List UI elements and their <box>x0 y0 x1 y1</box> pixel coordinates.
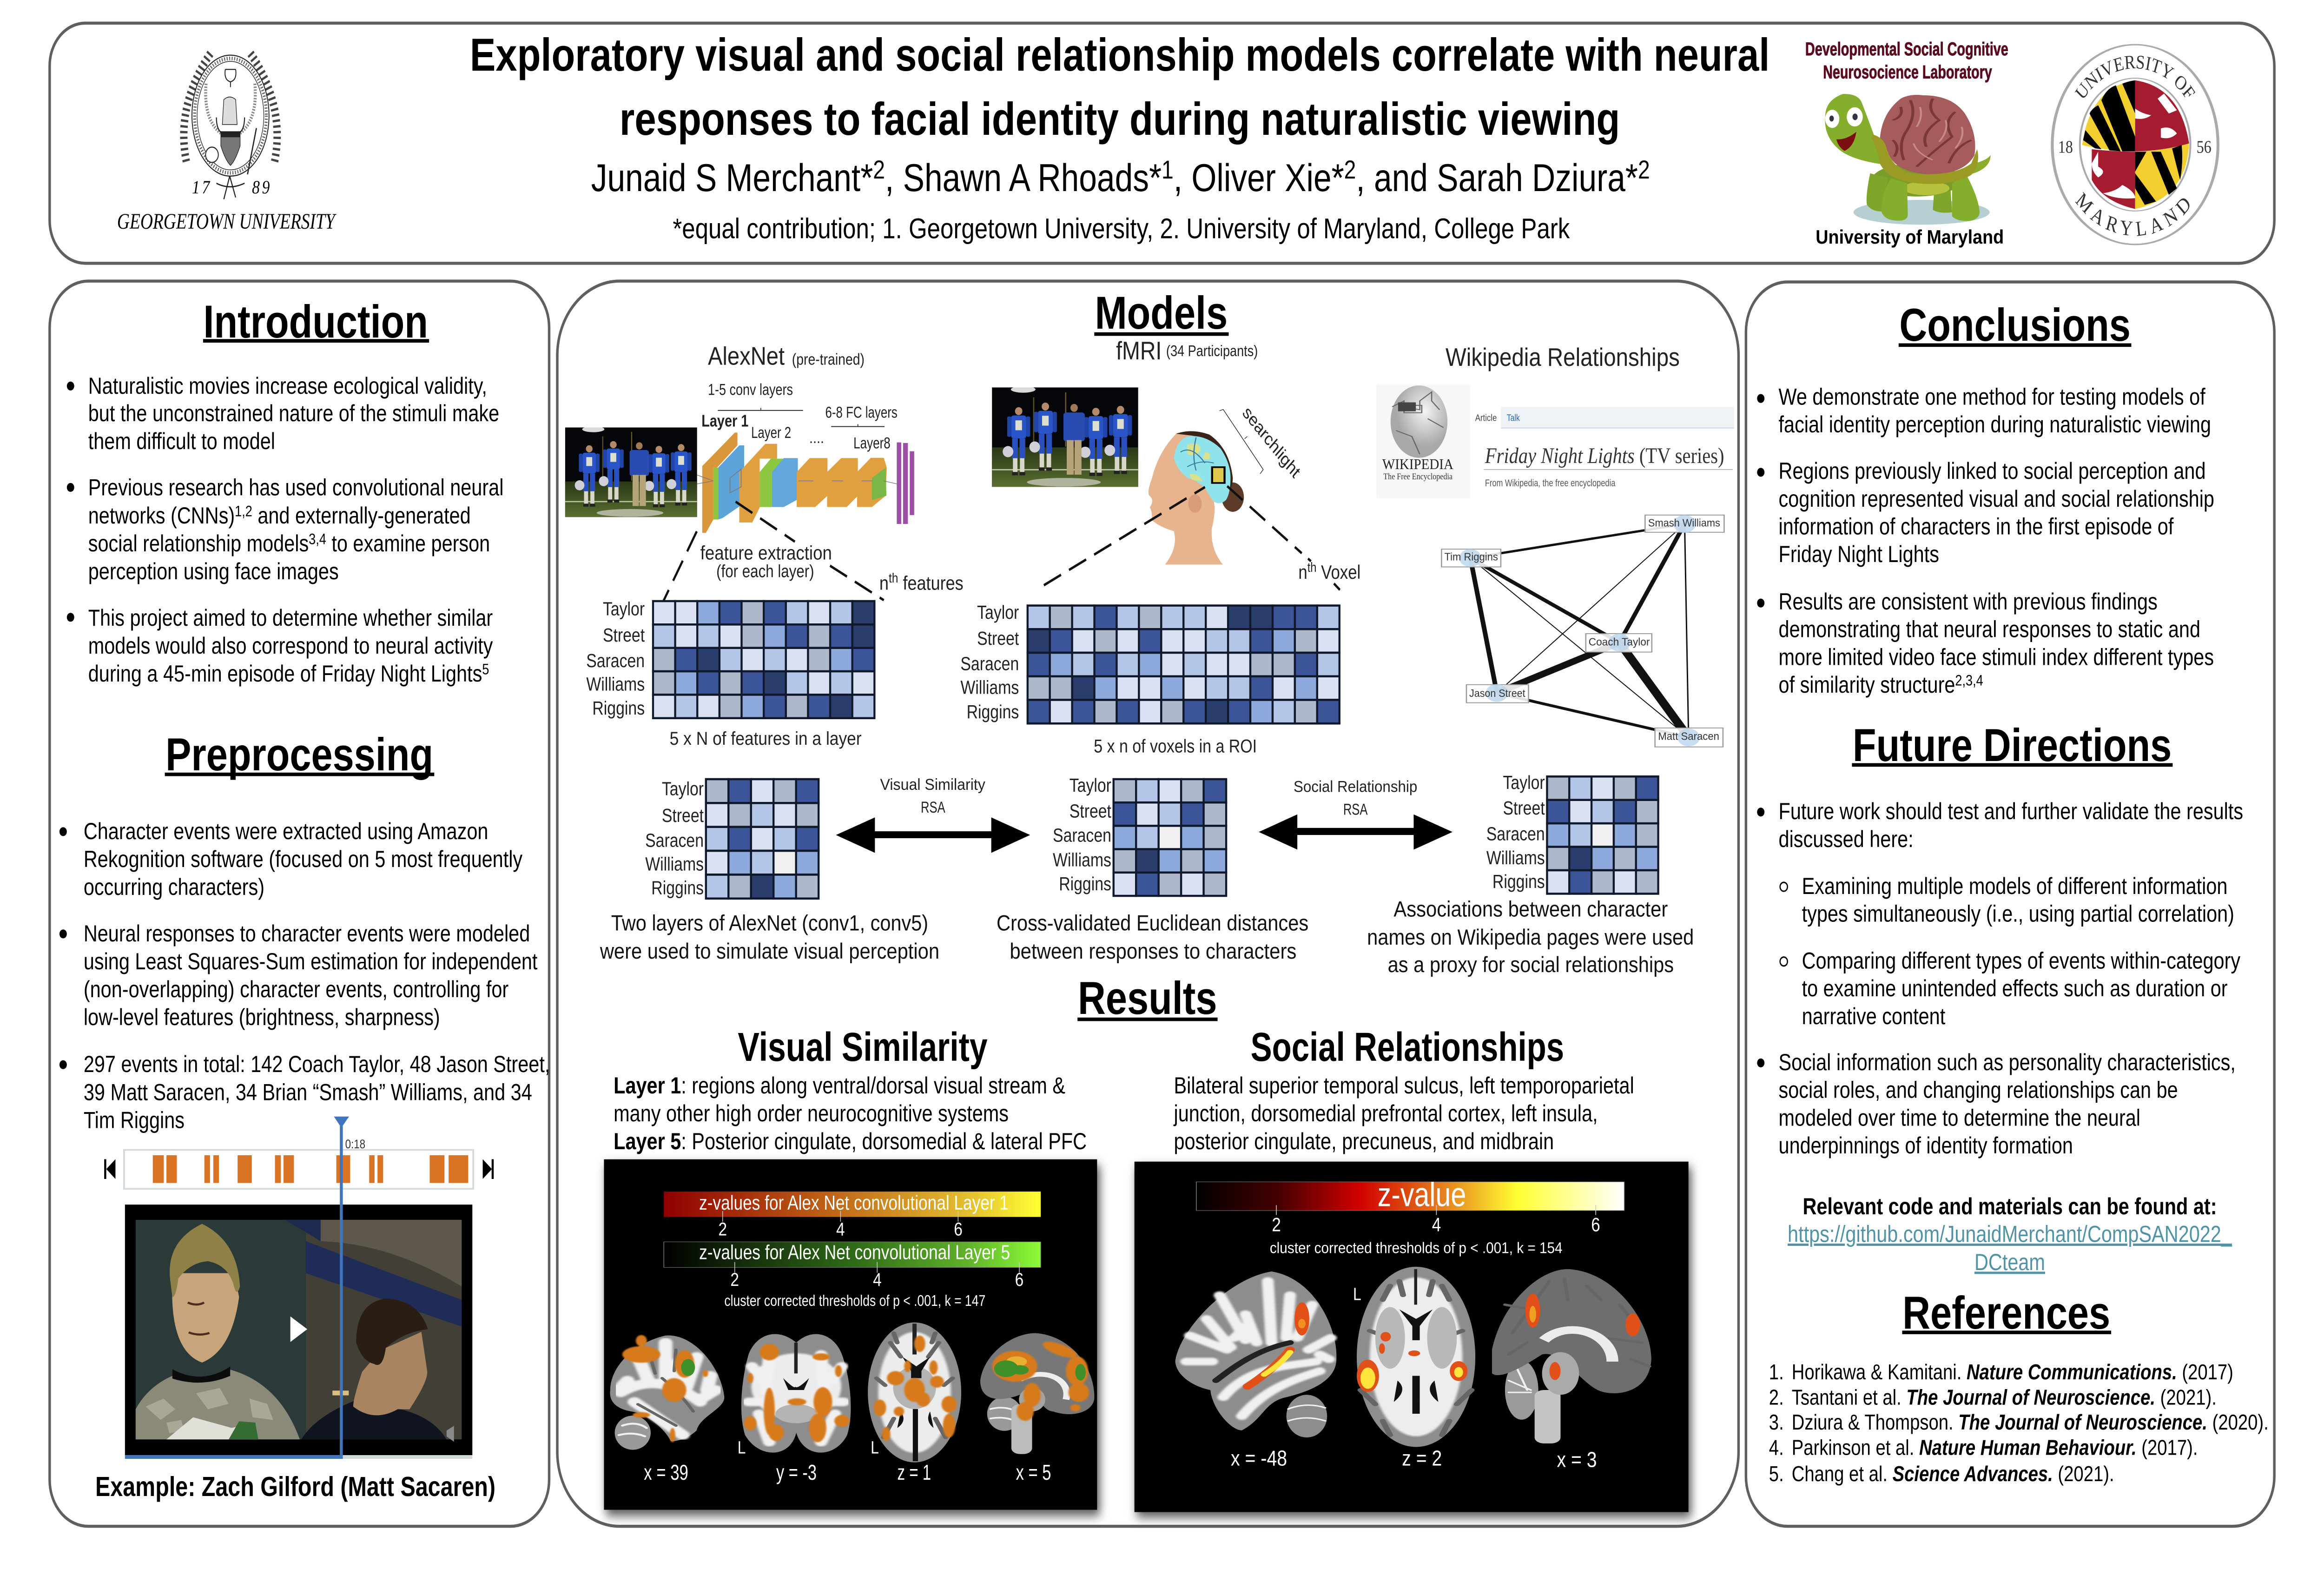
row labels: fMRI RDM: Riggins <box>1059 873 1111 894</box>
heading: References: References <box>1902 1287 2110 1339</box>
colorbar label: 4 <box>1432 1214 1441 1236</box>
slice labels: x = -48 <box>1231 1446 1287 1470</box>
row labels: fMRI RDM: Williams <box>1053 849 1111 870</box>
text block: introduction bullets: models would also correspond to neural activity <box>88 633 493 659</box>
authors: , Oliver Xie* <box>1174 156 1344 199</box>
arrow: social relationship RSA <box>1259 814 1452 850</box>
row labels: voxel matrix: Taylor <box>977 602 1019 623</box>
code and materials note: DCteam <box>1974 1250 2045 1275</box>
brain slice: z = 1 <box>868 1323 961 1463</box>
feature extraction label: feature extraction <box>700 543 832 564</box>
authors: 2 <box>1344 155 1356 184</box>
text block: introduction bullets: 5 <box>482 661 489 678</box>
colorbar: z-value <box>1196 1182 1624 1215</box>
row labels: voxel matrix: Williams <box>960 676 1019 698</box>
row labels: fMRI RDM: Saracen <box>1053 825 1111 846</box>
code and materials note <box>1788 1193 2232 1275</box>
colorbar labels: z-values for Alex Net convolutional Layer 1 <box>699 1191 1009 1214</box>
colorbar labels <box>699 1191 1023 1310</box>
row labels: Wikipedia RDM: Saracen <box>1486 823 1545 844</box>
text block: future directions bullets: to examine unintended effects such as duration or <box>1802 976 2228 1001</box>
text block: introduction bullets: perception using face images <box>88 558 339 584</box>
slice labels <box>644 1438 1051 1484</box>
colorbar label <box>1270 1176 1600 1257</box>
caption: Wikipedia RDM: Associations between character <box>1393 897 1668 921</box>
brain map panel: social relationships <box>1135 1162 1691 1517</box>
text block: preprocessing bullets: low-level features (brightness, sharpness) <box>84 1005 440 1030</box>
colorbar label: 2 <box>1272 1214 1281 1236</box>
text block: visual similarity results: Layer 1: regions along ventral/dorsal visual stream & <box>614 1072 1065 1099</box>
row labels: fMRI RDM <box>1053 775 1112 894</box>
photo: cast frame for fMRI <box>992 386 1138 487</box>
text block: visual similarity results: Layer 5: Posterior cingulate, dorsomedial & lateral PFC <box>614 1128 1087 1154</box>
label: social relationship RSA: RSA <box>1343 800 1368 818</box>
network graph: Coach Taylor <box>1589 636 1650 648</box>
text block: future directions bullets: Examining multiple models of different information <box>1802 873 2227 899</box>
lab name <box>1805 39 2008 82</box>
panel: Conclusions, Future Directions, References <box>1746 282 2274 1526</box>
text block: future directions bullets: Social information such as personality characteristics, <box>1779 1049 2236 1075</box>
label: visual similarity RSA: RSA <box>921 798 945 816</box>
matrix: Wikipedia RDM <box>1547 776 1658 894</box>
network graph: Tim Riggins <box>1444 551 1498 563</box>
slice labels: y = -3 <box>776 1461 817 1484</box>
row labels: feature matrix <box>586 598 645 719</box>
heading: Preprocessing: Preprocessing <box>165 729 433 781</box>
text block: introduction bullets: and externally-generated <box>252 503 471 529</box>
network graph: Matt Saracen <box>1658 731 1719 742</box>
text block: preprocessing bullets: Neural responses to character events were modeled <box>84 920 530 947</box>
colorbar label: 6 <box>1591 1214 1600 1236</box>
network graph: Jason Street <box>1469 688 1525 699</box>
title <box>470 29 1769 145</box>
text block: conclusions bullets: cognition represented visual and social relationship <box>1779 486 2214 512</box>
subheading: Social Relationships: Social Relationships <box>1251 1025 1564 1070</box>
row labels: fMRI RDM: Taylor <box>1070 775 1111 795</box>
panel: Models and Results <box>557 281 1738 1526</box>
text block: conclusions bullets <box>1757 384 2214 698</box>
convolutional network layers <box>697 433 914 533</box>
brain slice: x = 39 <box>610 1335 724 1450</box>
AlexNet label: AlexNet <box>708 341 785 370</box>
text block: social relationship results: junction, dorsomedial prefrontal cortex, left insula, <box>1173 1100 1598 1126</box>
slice labels: x = 5 <box>1016 1461 1051 1484</box>
searchlight label: searchlight <box>1239 403 1304 482</box>
text block: preprocessing bullets: using Least Squares-Sum estimation for independent <box>84 949 538 974</box>
Wikipedia relationships diagram <box>1376 343 1734 747</box>
heading: Conclusions: Conclusions <box>1899 299 2131 351</box>
text block: introduction bullets: them difficult to model <box>88 428 275 454</box>
subheading: Visual Similarity: Visual Similarity <box>738 1025 988 1070</box>
text block: future directions bullets: narrative content <box>1802 1003 1945 1029</box>
row labels: Wikipedia RDM: Taylor <box>1503 772 1545 793</box>
caption: fMRI RDM <box>997 911 1308 964</box>
row labels: AlexNet RDM: Riggins <box>651 877 704 898</box>
text block: preprocessing bullets: 297 events in total: 142 Coach Taylor, 48 Jason Street, <box>84 1052 550 1077</box>
text block: future directions bullets: Comparing different types of events within-category <box>1802 948 2240 973</box>
row labels: voxel matrix: Riggins <box>967 701 1019 722</box>
caption: AlexNet RDM: were used to simulate visual perception <box>600 939 939 964</box>
colorbar: layer 1 <box>664 1192 1041 1222</box>
caption: AlexNet RDM: Two layers of AlexNet (conv1, conv5) <box>611 911 928 936</box>
icon: turtle with brain shell <box>1825 94 1991 225</box>
row labels: feature matrix: Taylor <box>603 598 645 619</box>
text block: preprocessing bullets: (non-overlapping) character events, controlling for <box>84 977 508 1002</box>
brain slice: z = 2 <box>1357 1267 1475 1447</box>
Wikipedia page screenshot: Article <box>1475 412 1497 423</box>
text block: preprocessing bullets <box>59 818 550 1133</box>
text block: conclusions bullets: facial identity perception during naturalistic viewing <box>1779 412 2211 437</box>
slice labels: x = 3 <box>1557 1448 1597 1472</box>
nth voxel label: n <box>1298 562 1307 583</box>
text block: conclusions bullets: Results are consistent with previous findings <box>1779 589 2158 615</box>
feature extraction label: features <box>898 573 964 594</box>
icon: University of Maryland seal <box>2052 45 2218 245</box>
text block: introduction bullets: Naturalistic movies increase ecological validity, <box>88 373 487 399</box>
text block: introduction bullets: This project aimed to determine whether similar <box>88 605 493 631</box>
slice labels: L <box>738 1438 746 1457</box>
icon: head with brain map <box>1149 410 1263 564</box>
icon: University of Maryland seal: 18 <box>2058 137 2073 157</box>
participants label: (34 Participants) <box>1166 342 1258 360</box>
text block: conclusions bullets: information of characters in the first episode of <box>1779 514 2174 539</box>
text block: future directions bullets: Future work should test and further validate the results <box>1779 799 2243 824</box>
lab name: Neurosocience Laboratory <box>1823 62 1992 82</box>
text block: future directions bullets: modeled over time to determine the neural <box>1779 1105 2140 1131</box>
text block: preprocessing bullets: Rekognition software (focused on 5 most frequently <box>84 847 522 872</box>
row labels: fMRI RDM: Street <box>1070 800 1112 821</box>
network graph <box>1441 515 1724 747</box>
text block: introduction bullets: social relationship models <box>88 530 309 556</box>
authors: 2 <box>873 155 885 184</box>
brain slice: x = 3 <box>1492 1269 1651 1443</box>
progress bar <box>125 1455 472 1459</box>
heading: Future Directions: Future Directions <box>1853 720 2172 771</box>
label: visual similarity RSA: Visual Similarity <box>880 775 985 794</box>
reference list <box>1769 1360 2269 1486</box>
brain map panel: visual similarity <box>604 1159 1100 1516</box>
row labels: voxel matrix: Saracen <box>960 653 1019 674</box>
row labels: voxel matrix: Street <box>977 628 1019 649</box>
AlexNet label: Layer 2 <box>751 424 791 442</box>
colorbar: layer 5 <box>664 1242 1041 1273</box>
Wikipedia page screenshot: WIKIPEDIA <box>1382 457 1453 473</box>
authors: 2 <box>1638 155 1650 184</box>
AlexNet label: .... <box>809 428 824 446</box>
fMRI label: fMRI <box>1116 336 1162 365</box>
title: Exploratory visual and social relationship models correlate with neural <box>470 29 1769 81</box>
reference list: 4. Parkinson et al. Nature Human Behaviour. (2017). <box>1769 1436 2198 1459</box>
reference list: 5. Chang et al. Science Advances. (2021). <box>1769 1462 2114 1486</box>
authors: 1 <box>1162 155 1174 184</box>
authors: , and Sarah Dziura* <box>1356 156 1638 199</box>
heading: Results: Results <box>1078 973 1217 1024</box>
video frame <box>125 1205 472 1455</box>
row labels: Wikipedia RDM: Street <box>1503 797 1545 818</box>
text block: preprocessing bullets: Tim Riggins <box>84 1107 185 1133</box>
text block: introduction bullets: networks (CNNs) <box>88 503 235 529</box>
authors: Junaid S Merchant* <box>591 156 873 199</box>
colorbar labels: cluster corrected thresholds of p < .001, k = 147 <box>724 1293 985 1310</box>
text block: conclusions bullets: 2,3,4 <box>1955 672 1983 689</box>
code and materials note: Relevant code and materials can be found at: <box>1802 1193 2217 1219</box>
matrix: AlexNet RDM <box>706 779 819 899</box>
Wikipedia heading: Wikipedia Relationships <box>1446 343 1680 371</box>
matrix: fMRI RDM <box>1114 779 1226 896</box>
row labels: feature matrix: Street <box>603 624 645 646</box>
slice labels: z = 2 <box>1402 1446 1442 1470</box>
fMRI model diagram <box>960 336 1360 756</box>
caption: example: Example: Zach Gilford (Matt Sacaren) <box>95 1471 495 1502</box>
colorbar label: z-value <box>1378 1176 1466 1214</box>
text block: future directions bullets: social roles, and changing relationships can be <box>1779 1077 2178 1103</box>
text block: future directions bullets <box>1757 799 2243 1159</box>
row labels: AlexNet RDM: Saracen <box>645 829 704 851</box>
icon: Georgetown seal <box>184 53 277 199</box>
row labels: Wikipedia RDM: Riggins <box>1492 871 1545 892</box>
brain slice: x = 5 <box>980 1333 1094 1454</box>
colorbar labels: 6 <box>1015 1269 1023 1290</box>
panel: header <box>50 23 2274 263</box>
row labels: AlexNet RDM: Street <box>662 805 704 826</box>
colorbar labels: 2 <box>730 1269 739 1290</box>
matrix: 5 x N features <box>653 601 874 718</box>
row labels: AlexNet RDM: Williams <box>645 853 704 874</box>
feature extraction label: n <box>879 573 888 594</box>
row labels: AlexNet RDM: Taylor <box>662 778 704 799</box>
slice labels: z = 1 <box>897 1461 931 1484</box>
AlexNet label: Layer 1 <box>701 412 748 430</box>
text block: visual similarity results <box>614 1072 1087 1154</box>
icon: University of Maryland seal: 56 <box>2197 137 2212 157</box>
AlexNet label: 1-5 conv layers <box>708 380 793 398</box>
affiliations: *equal contribution; 1. Georgetown University, 2. University of Maryland, College Park <box>673 212 1570 245</box>
text block: social relationship results: posterior cingulate, precuneus, and midbrain <box>1174 1128 1554 1154</box>
nth voxel label: th <box>1307 560 1317 575</box>
row labels: voxel matrix <box>960 602 1019 722</box>
code and materials note: https://github.com/JunaidMerchant/CompSAN2022_ <box>1788 1221 2232 1247</box>
Wikipedia page screenshot: From Wikipedia, the free encyclopedia <box>1485 478 1616 489</box>
caption: AlexNet RDM <box>600 911 939 964</box>
timeline bar <box>104 1150 494 1189</box>
text block: introduction bullets: during a 45-min episode of Friday Night Lights <box>88 661 482 687</box>
network graph: Smash Williams <box>1648 517 1720 529</box>
text block: conclusions bullets: Friday Night Lights <box>1779 542 1939 567</box>
AlexNet label: Layer8 <box>853 434 891 452</box>
reference list: 3. Dziura & Thompson. The Journal of Neuroscience. (2020). <box>1769 1410 2269 1434</box>
dashed projection lines <box>1044 486 1340 590</box>
heading: Models: Models <box>1095 287 1228 339</box>
text block: conclusions bullets: more limited video face stimuli index different types <box>1779 644 2214 670</box>
feature extraction label: th <box>889 570 898 586</box>
lab affiliation text: University of Maryland <box>1816 226 2004 248</box>
arrow: visual similarity RSA <box>836 817 1030 853</box>
text block: introduction bullets: to examine person <box>326 530 490 556</box>
text block: preprocessing bullets: 39 Matt Saracen, 34 Brian “Smash” Williams, and 34 <box>84 1079 532 1105</box>
colorbar labels: 2 <box>719 1219 727 1239</box>
colorbar labels: 6 <box>954 1219 963 1239</box>
Wikipedia page screenshot: Talk <box>1507 412 1520 423</box>
caption: voxel matrix: 5 x n of voxels in a ROI <box>1094 736 1257 756</box>
brain slice: x = -48 <box>1175 1271 1336 1437</box>
slice labels: L <box>871 1438 879 1457</box>
row labels: AlexNet RDM <box>645 778 704 898</box>
caption: fMRI RDM: Cross-validated Euclidean distances <box>997 911 1308 936</box>
photo: cast frame for AlexNet <box>565 426 697 517</box>
title: responses to facial identity during naturalistic viewing <box>620 93 1620 145</box>
icon: University of Maryland seal: MARYLAND <box>2072 188 2198 241</box>
colorbar labels: 4 <box>836 1219 845 1239</box>
dashed projection lines <box>663 502 884 601</box>
caption: Wikipedia RDM: names on Wikipedia pages were used <box>1367 925 1694 950</box>
authors: , Shawn A Rhoads* <box>885 156 1162 199</box>
Wikipedia page screenshot <box>1376 384 1734 498</box>
caption: Wikipedia RDM: as a proxy for social relationships <box>1388 953 1674 977</box>
text block: conclusions bullets: of similarity structure <box>1779 672 1955 698</box>
text block: social relationship results <box>1173 1072 1634 1154</box>
caption: feature matrix: 5 x N of features in a layer <box>670 728 862 749</box>
feature extraction label: (for each layer) <box>716 562 814 581</box>
colorbar labels: z-values for Alex Net convolutional Layer 5 <box>699 1240 1010 1264</box>
feature extraction label <box>700 543 964 594</box>
text block: conclusions bullets: Regions previously linked to social perception and <box>1779 458 2206 484</box>
row labels: feature matrix: Saracen <box>586 650 645 671</box>
reference list: 2. Tsantani et al. The Journal of Neuroscience. (2021). <box>1769 1385 2217 1409</box>
text block: visual similarity results: many other high order neurocognitive systems <box>614 1100 1009 1126</box>
text block: future directions bullets: types simultaneously (i.e., using partial correlation) <box>1802 901 2234 927</box>
brain slice: y = -3 <box>741 1334 851 1453</box>
colorbar label: cluster corrected thresholds of p < .001, k = 154 <box>1270 1240 1563 1257</box>
Wikipedia page screenshot: Friday Night Lights (TV series) <box>1485 444 1724 468</box>
colorbar labels: 4 <box>873 1269 882 1290</box>
caption: Wikipedia RDM <box>1367 897 1694 977</box>
AlexNet label: 6-8 FC layers <box>825 403 898 421</box>
text block: introduction bullets: 1,2 <box>235 503 252 520</box>
RSA comparison row <box>600 772 1694 977</box>
label: visual similarity RSA <box>880 775 985 816</box>
timestamp: 0:18 <box>345 1138 365 1152</box>
text block: introduction bullets: but the unconstrained nature of the stimuli make <box>88 401 499 426</box>
seal year left: 17 <box>192 177 212 198</box>
AlexNet label <box>701 341 898 452</box>
AlexNet label: (pre-trained) <box>792 350 865 368</box>
text block: future directions bullets: underpinnings of identity formation <box>1779 1133 2073 1159</box>
slice labels: x = 39 <box>644 1461 688 1484</box>
text block: introduction bullets: 3,4 <box>309 531 326 548</box>
text block: preprocessing bullets: occurring characters) <box>84 874 264 900</box>
playhead <box>334 1117 349 1459</box>
AlexNet model diagram <box>565 341 964 749</box>
panel: Introduction and Preprocessing <box>50 281 550 1526</box>
label: social relationship RSA: Social Relationship <box>1294 777 1417 795</box>
caption: fMRI RDM: between responses to characters <box>1010 939 1296 964</box>
video timeline and frame <box>104 1117 494 1459</box>
text block: introduction bullets: Previous research has used convolutional neural <box>88 475 503 501</box>
heading: Introduction: Introduction <box>203 296 428 348</box>
slice labels <box>1231 1284 1597 1472</box>
seal year right: 89 <box>252 177 272 198</box>
row labels: feature matrix: Williams <box>586 674 645 695</box>
reference list: 1. Horikawa & Kamitani. Nature Communications. (2017) <box>1769 1360 2233 1384</box>
slice labels: L <box>1353 1284 1361 1304</box>
row labels: Wikipedia RDM <box>1486 772 1545 892</box>
text block: future directions bullets: discussed here: <box>1779 826 1914 852</box>
icon: University of Maryland seal: UNIVERSITY OF <box>2072 51 2199 104</box>
text block: preprocessing bullets: Character events were extracted using Amazon <box>84 818 488 844</box>
row labels: feature matrix: Riggins <box>592 697 645 719</box>
Georgetown University wordmark: GEORGETOWN UNIVERSITY <box>117 209 337 234</box>
text block: social relationship results: Bilateral superior temporal sulcus, left temporoparietal <box>1174 1072 1634 1099</box>
Wikipedia page screenshot: The Free Encyclopedia <box>1383 471 1452 482</box>
row labels: Wikipedia RDM: Williams <box>1486 847 1545 868</box>
lab name: Developmental Social Cognitive <box>1805 39 2008 60</box>
text block: introduction bullets <box>67 373 503 687</box>
label: social relationship RSA <box>1294 777 1417 818</box>
brackets <box>718 408 885 427</box>
text block: conclusions bullets: demonstrating that neural responses to static and <box>1779 616 2200 642</box>
text block: conclusions bullets: We demonstrate one method for testing models of <box>1779 384 2205 410</box>
matrix: 5 x n voxels <box>1028 606 1340 723</box>
nth voxel label: Voxel <box>1317 562 1360 583</box>
